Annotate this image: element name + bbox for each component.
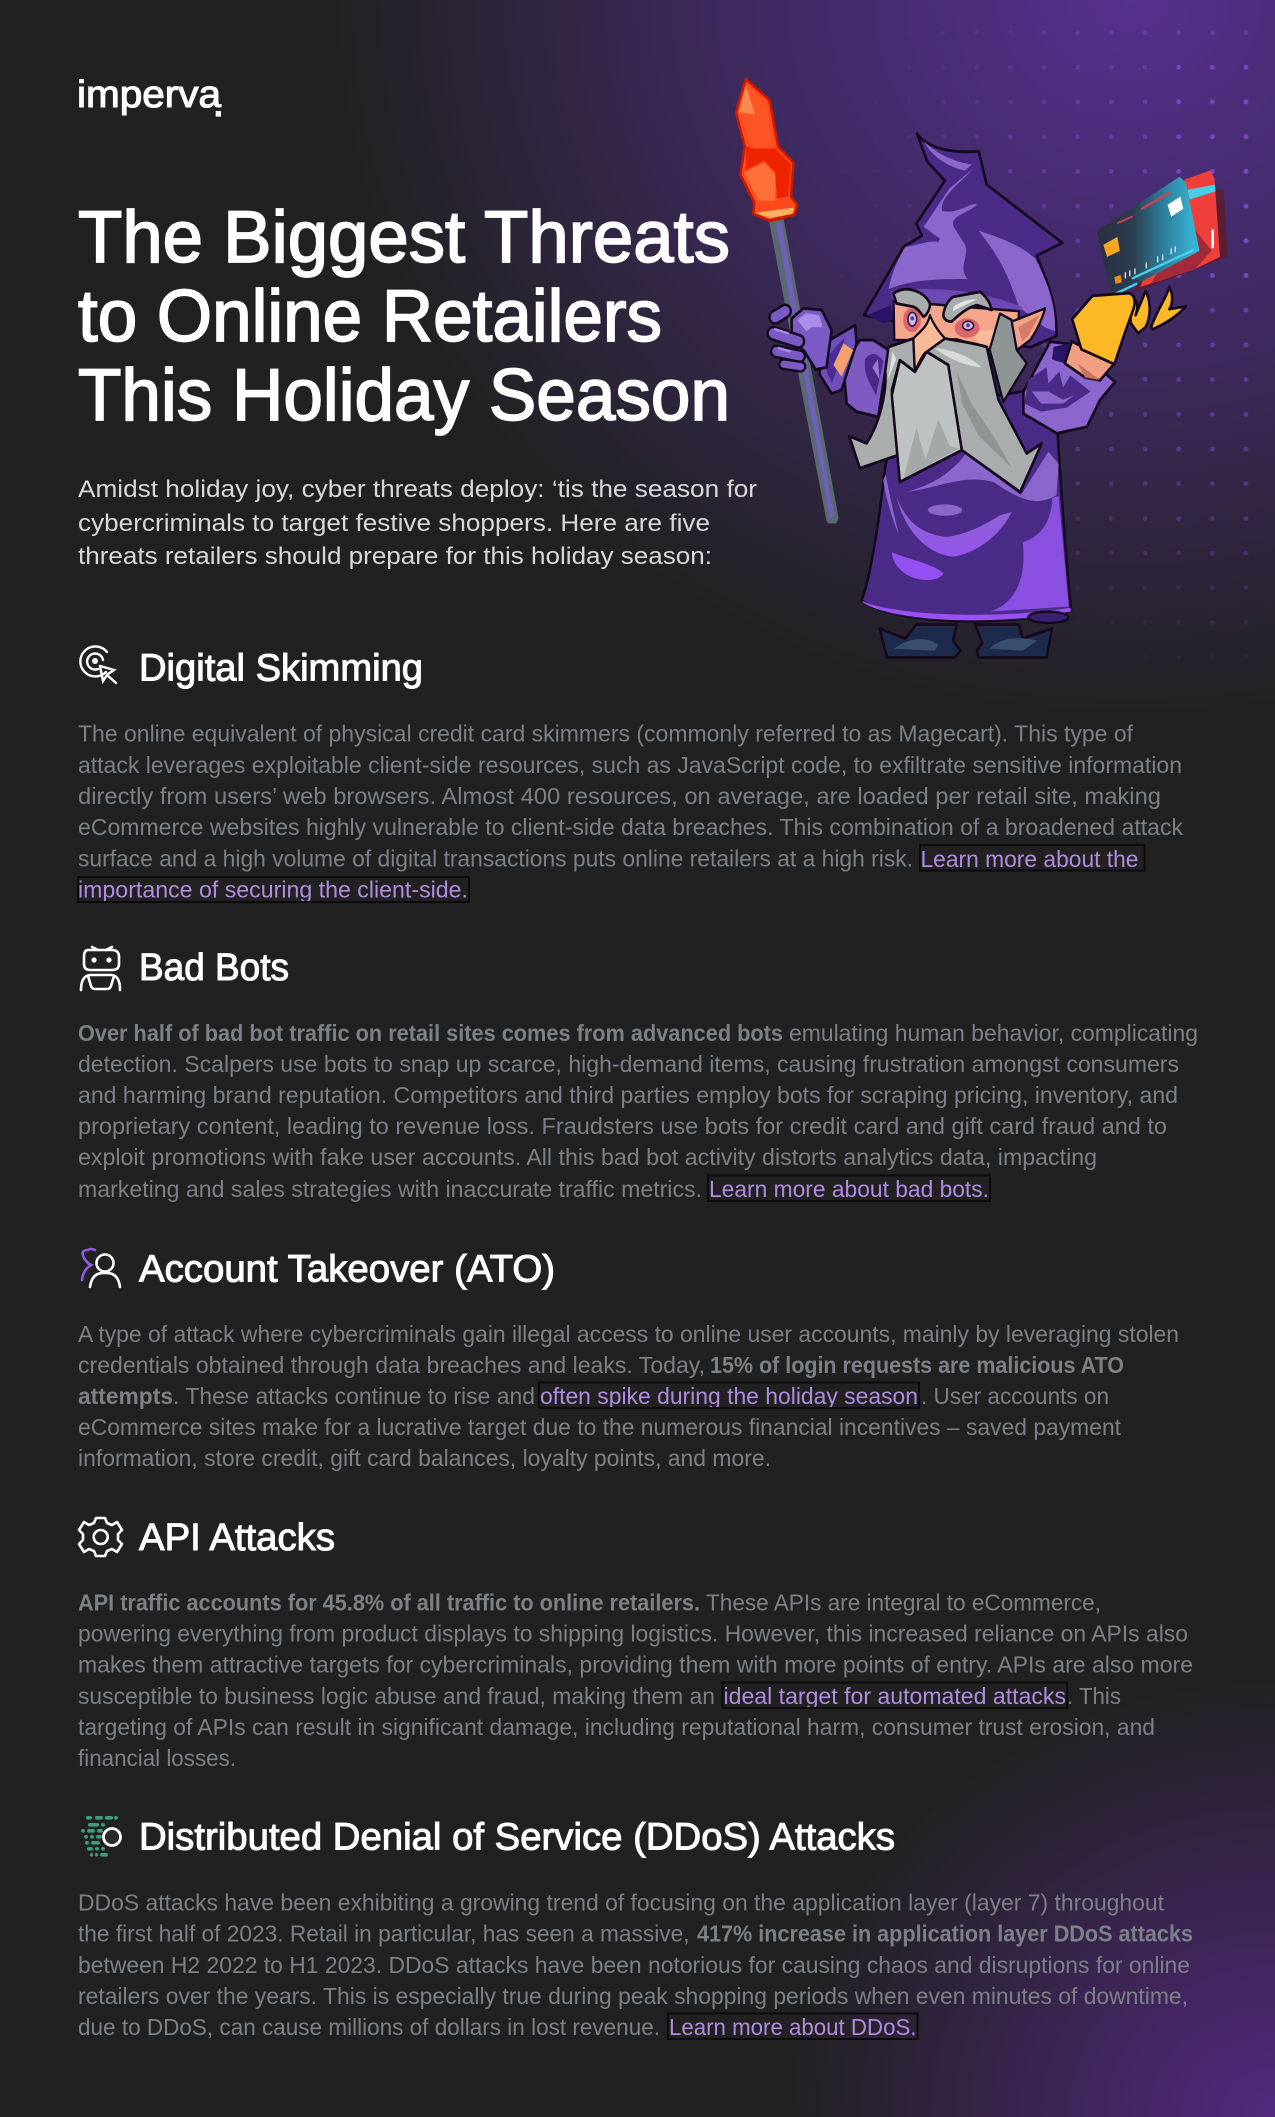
- body text: 15% of login requests are malicious ATO: [710, 1352, 1124, 1378]
- ear and side hair: [990, 308, 1045, 402]
- body text: targeting of APIs can result in significant damage, including reputational harm, consumer trust erosion, and: [78, 1714, 1155, 1740]
- heading: Bad Bots: [139, 947, 289, 989]
- section: Digital Skimming: [78, 646, 1183, 903]
- icon: target cursor: [80, 646, 116, 683]
- section: DDoS Attacks: [78, 1816, 1193, 2040]
- body text: . User accounts on: [921, 1383, 1109, 1409]
- icon: robot: [81, 947, 120, 990]
- robe: [861, 392, 1071, 623]
- link: Learn more about DDoS.: [669, 2014, 916, 2040]
- body text: A type of attack where cybercriminals gain illegal access to online user accounts, mainly by leveraging stolen: [78, 1321, 1179, 1347]
- body text: Over half of bad bot traffic on retail sites comes from advanced bots: [78, 1020, 783, 1046]
- body text: detection. Scalpers use bots to snap up scarce, high-demand items, causing frustration amongst consumers: [78, 1051, 1179, 1077]
- body text: . This: [1067, 1683, 1121, 1709]
- body text: financial losses.: [78, 1745, 236, 1771]
- body text: . These attacks continue to rise and: [173, 1383, 535, 1409]
- body text: powering everything from product displays to shipping logistics. However, this increased reliance on APIs also: [78, 1621, 1188, 1647]
- heading: Account Takeover (ATO): [139, 1248, 555, 1290]
- eyebrows: [893, 289, 992, 322]
- link: often spike during the holiday season: [540, 1383, 918, 1409]
- body text: due to DDoS, can cause millions of dollars in lost revenue.: [78, 2014, 660, 2040]
- body text: [78, 1020, 1198, 1202]
- icon: users: [82, 1249, 120, 1287]
- icon: gear: [79, 1518, 122, 1556]
- left glove: [773, 308, 832, 369]
- intro text: Amidst holiday joy, cyber threats deploy: ‘tis the season for: [78, 476, 757, 503]
- title: The Biggest Threats: [78, 197, 730, 278]
- body text: susceptible to business logic abuse and fraud, making them an: [78, 1683, 715, 1709]
- dot grid: [874, 30, 1248, 660]
- body text: attack leverages exploitable client-side resources, such as JavaScript code, to exfiltrate sensitive information: [78, 752, 1182, 778]
- credit cards: [1097, 171, 1228, 295]
- title: [78, 197, 730, 436]
- wizard illustration: [736, 79, 1228, 658]
- hat: [864, 134, 1062, 347]
- title: This Holiday Season: [78, 355, 730, 436]
- body text: information, store credit, gift card balances, loyalty points, and more.: [78, 1445, 771, 1471]
- body text: and harming brand reputation. Competitors and third parties employ bots for scraping pricing, inventory, and: [78, 1082, 1178, 1108]
- body text: 417% increase in application layer DDoS attacks: [697, 1921, 1193, 1947]
- intro text: cybercriminals to target festive shoppers. Here are five: [78, 510, 710, 537]
- body text: exploit promotions with fake user accounts. All this bad bot activity distorts analytics data, impacting: [78, 1144, 1097, 1170]
- body text: API traffic accounts for 45.8% of all traffic to online retailers.: [78, 1590, 700, 1616]
- body text: emulating human behavior, complicating: [789, 1020, 1198, 1046]
- intro text: [78, 476, 757, 570]
- body text: eCommerce sites make for a lucrative target due to the numerous financial incentives – saved payment: [78, 1414, 1122, 1440]
- crystal: [736, 79, 797, 221]
- link: [78, 845, 1144, 903]
- link: Learn more about the: [920, 846, 1138, 872]
- section: API Attacks: [78, 1517, 1193, 1771]
- section: Bad Bots: [78, 947, 1198, 1202]
- link: importance of securing the client-side.: [78, 877, 468, 903]
- heading: Digital Skimming: [139, 648, 423, 690]
- body text: DDoS attacks have been exhibiting a growing trend of focusing on the application layer (layer 7) throughout: [78, 1890, 1165, 1916]
- yellow glove: [1072, 287, 1186, 364]
- body text: marketing and sales strategies with inaccurate traffic metrics.: [78, 1176, 702, 1202]
- boots: [880, 625, 1052, 658]
- logo: imperva: imperva: [77, 74, 222, 116]
- left arm: [818, 325, 888, 417]
- body text: [78, 1590, 1193, 1771]
- section: Account Takeover: [78, 1248, 1179, 1471]
- body text: makes them attractive targets for cybercriminals, providing them with more points of entry. APIs are also more: [78, 1652, 1193, 1678]
- body text: attempts: [78, 1383, 173, 1409]
- icon: DDoS cloud of dots: [81, 1816, 120, 1857]
- body text: surface and a high volume of digital transactions puts online retailers at a high risk.: [78, 846, 913, 872]
- link: ideal target for automated attacks: [724, 1683, 1066, 1709]
- body text: [78, 1890, 1193, 2040]
- body text: between H2 2022 to H1 2023. DDoS attacks have been notorious for causing chaos and disruptions for online: [78, 1952, 1190, 1978]
- staff: [769, 219, 839, 523]
- body text: eCommerce websites highly vulnerable to client-side data breaches. This combination of a broadened attack: [78, 814, 1183, 840]
- body text: [78, 1321, 1179, 1471]
- body text: directly from users’ web browsers. Almost 400 resources, on average, are loaded per retail site, making: [78, 783, 1161, 809]
- nose: [913, 315, 945, 372]
- beard: [849, 338, 1042, 492]
- right arm: [1023, 341, 1115, 433]
- body text: [78, 721, 1183, 872]
- body text: These APIs are integral to eCommerce,: [706, 1590, 1101, 1616]
- link: Learn more about bad bots.: [709, 1176, 989, 1202]
- title: to Online Retailers: [78, 276, 662, 357]
- body text: the first half of 2023. Retail in particular, has seen a massive,: [78, 1921, 690, 1947]
- intro text: threats retailers should prepare for this holiday season:: [78, 543, 712, 570]
- heading: Distributed Denial of Service (DDoS) Attacks: [139, 1816, 895, 1858]
- face: [894, 301, 1019, 349]
- body text: credentials obtained through data breaches and leaks. Today,: [78, 1352, 705, 1378]
- heading: API Attacks: [139, 1517, 335, 1559]
- body text: retailers over the years. This is especially true during peak shopping periods when even minutes of downtime,: [78, 1983, 1188, 2009]
- body text: The online equivalent of physical credit card skimmers (commonly referred to as Magecart). This type of: [78, 721, 1134, 747]
- body text: proprietary content, leading to revenue loss. Fraudsters use bots for credit card and gift card fraud and to: [78, 1113, 1167, 1139]
